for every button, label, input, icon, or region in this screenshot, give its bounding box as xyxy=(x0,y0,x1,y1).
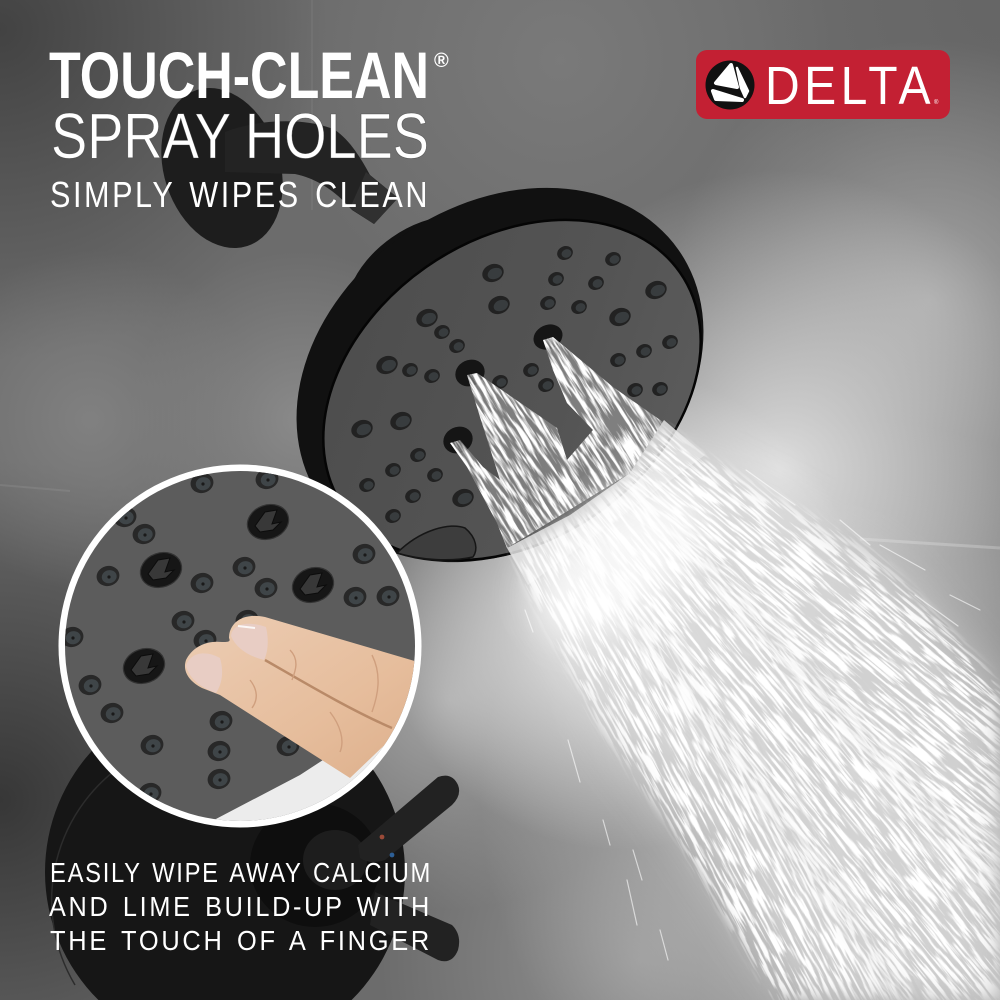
caption: AND LIME BUILD-UP WITH xyxy=(49,891,432,922)
water spray xyxy=(500,400,1000,1000)
trim hub xyxy=(250,803,380,927)
toggle tab xyxy=(397,526,476,560)
collar xyxy=(320,187,530,383)
wall visible below the face xyxy=(216,742,386,821)
spray haze xyxy=(530,465,1000,1000)
fingers xyxy=(185,616,425,778)
head body xyxy=(224,111,776,639)
logo: Delta: DELTA xyxy=(765,56,935,116)
logo: Delta: ® xyxy=(934,99,939,106)
subtitle: SIMPLY WIPES CLEAN xyxy=(50,174,430,215)
shower head xyxy=(224,111,776,639)
caption: THE TOUCH OF A FINGER xyxy=(50,925,432,956)
title: TOUCH-CLEAN xyxy=(49,38,429,112)
logo: Delta xyxy=(696,50,950,119)
inset circle: close-up of touch-clean holes xyxy=(50,460,430,830)
title: ® xyxy=(434,50,449,72)
close-up holes xyxy=(58,466,402,806)
valve trim plate and handle xyxy=(45,692,459,1000)
spray streaks xyxy=(500,400,1000,1000)
head face xyxy=(258,150,766,630)
icon: Delta triangle mark xyxy=(706,60,754,110)
title: SPRAY HOLES xyxy=(51,100,429,172)
lower lever xyxy=(370,892,459,961)
title xyxy=(49,38,449,172)
caption: EASILY WIPE AWAY CALCIUM xyxy=(50,857,432,888)
water jets on the head face xyxy=(450,337,663,548)
stray droplets xyxy=(525,470,1000,960)
shower arm and wall flange xyxy=(141,72,398,264)
wall tile lines xyxy=(0,0,1000,548)
upper lever xyxy=(358,776,459,862)
spray holes xyxy=(349,244,680,525)
caption xyxy=(49,857,432,956)
